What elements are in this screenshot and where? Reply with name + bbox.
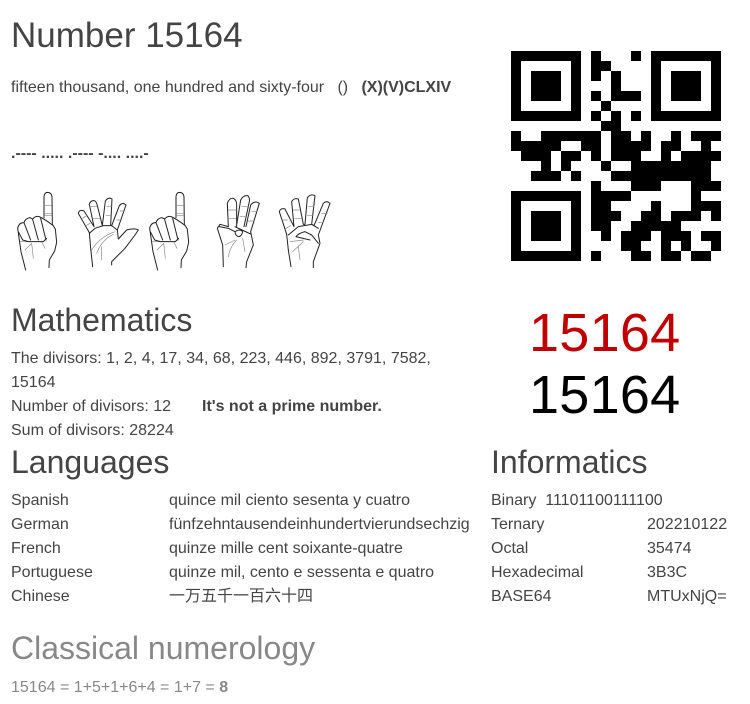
hand: three fingers (217, 196, 259, 268)
row: hexadecimal: Hexadecimal (491, 564, 583, 581)
panel: informatics table (491, 492, 727, 605)
row: Spanish (11, 492, 410, 509)
row: Spanish: Spanish (11, 492, 69, 509)
sum of divisors: Sum of divisors: 28224 (11, 422, 174, 439)
row: hexadecimal (491, 564, 687, 581)
row: ternary (491, 516, 727, 533)
divisors list: The divisors: 1, 2, 4, 17, 34, 68, 223, 446, 892, 3791, 7582, 15164 (11, 350, 431, 391)
row: BASE64: BASE64 (491, 588, 551, 605)
QR code (511, 51, 721, 261)
row: octal: 35474 (647, 540, 692, 557)
heading: languages: Languages (11, 444, 169, 480)
heading: informatics: Informatics (491, 444, 647, 480)
row: ternary: Ternary (491, 516, 544, 533)
row: Portuguese: quinze mil, cento e sessenta e quatro (169, 564, 434, 581)
row: octal: Octal (491, 540, 528, 557)
number of divisors and prime status: Number of divisors: 12 (11, 398, 171, 415)
row: Portuguese (11, 564, 434, 581)
row: Chinese: Chinese (11, 588, 70, 605)
row: German: fünfzehntausendeinhundertvierundsechzig (169, 516, 470, 533)
row: Spanish: quince mil ciento sesenta y cuatro (169, 492, 410, 509)
row: French: French (11, 540, 61, 557)
row: octal (491, 540, 692, 557)
sign language hands (17, 192, 330, 270)
row: French (11, 540, 403, 557)
number in black: 15164 (529, 365, 680, 425)
row: binary: Binary 11101100111100 (491, 492, 663, 509)
hand: four (279, 195, 330, 268)
hand: one (150, 192, 189, 270)
row: Chinese: 一万五千一百六十四 (169, 588, 313, 605)
number of divisors and prime status (11, 398, 382, 415)
row: German: German (11, 516, 69, 533)
row: hexadecimal: 3B3C (647, 564, 687, 581)
morse code: .---- ..... .---- -.... ....- (11, 145, 149, 162)
row: BASE64: MTUxNjQ= (647, 588, 727, 605)
row: Chinese (11, 587, 313, 605)
heading: mathematics: Mathematics (11, 302, 192, 338)
numerology calculation: 15164 = 1+5+1+6+4 = 1+7 = 8 (11, 679, 228, 696)
row: German (11, 516, 470, 533)
hand: one (18, 192, 57, 270)
hand: five (78, 198, 138, 267)
number in red: 15164 (529, 303, 680, 363)
panel: languages table (11, 492, 470, 605)
row: French: quinze mille cent soixante-quatre (169, 540, 403, 557)
row: Portuguese: Portuguese (11, 564, 93, 581)
panel: mathematics facts (11, 350, 431, 439)
number in words and roman numeral: fifteen thousand, one hundred and sixty-four () (X)(V)CLXIV (11, 79, 451, 96)
row: BASE64 (491, 588, 727, 605)
heading: classical numerology: Classical numerology (11, 630, 315, 666)
number of divisors and prime status: It's not a prime number. (202, 398, 382, 415)
title: Number 15164 (11, 16, 243, 55)
row: ternary: 202210122 (647, 516, 727, 533)
